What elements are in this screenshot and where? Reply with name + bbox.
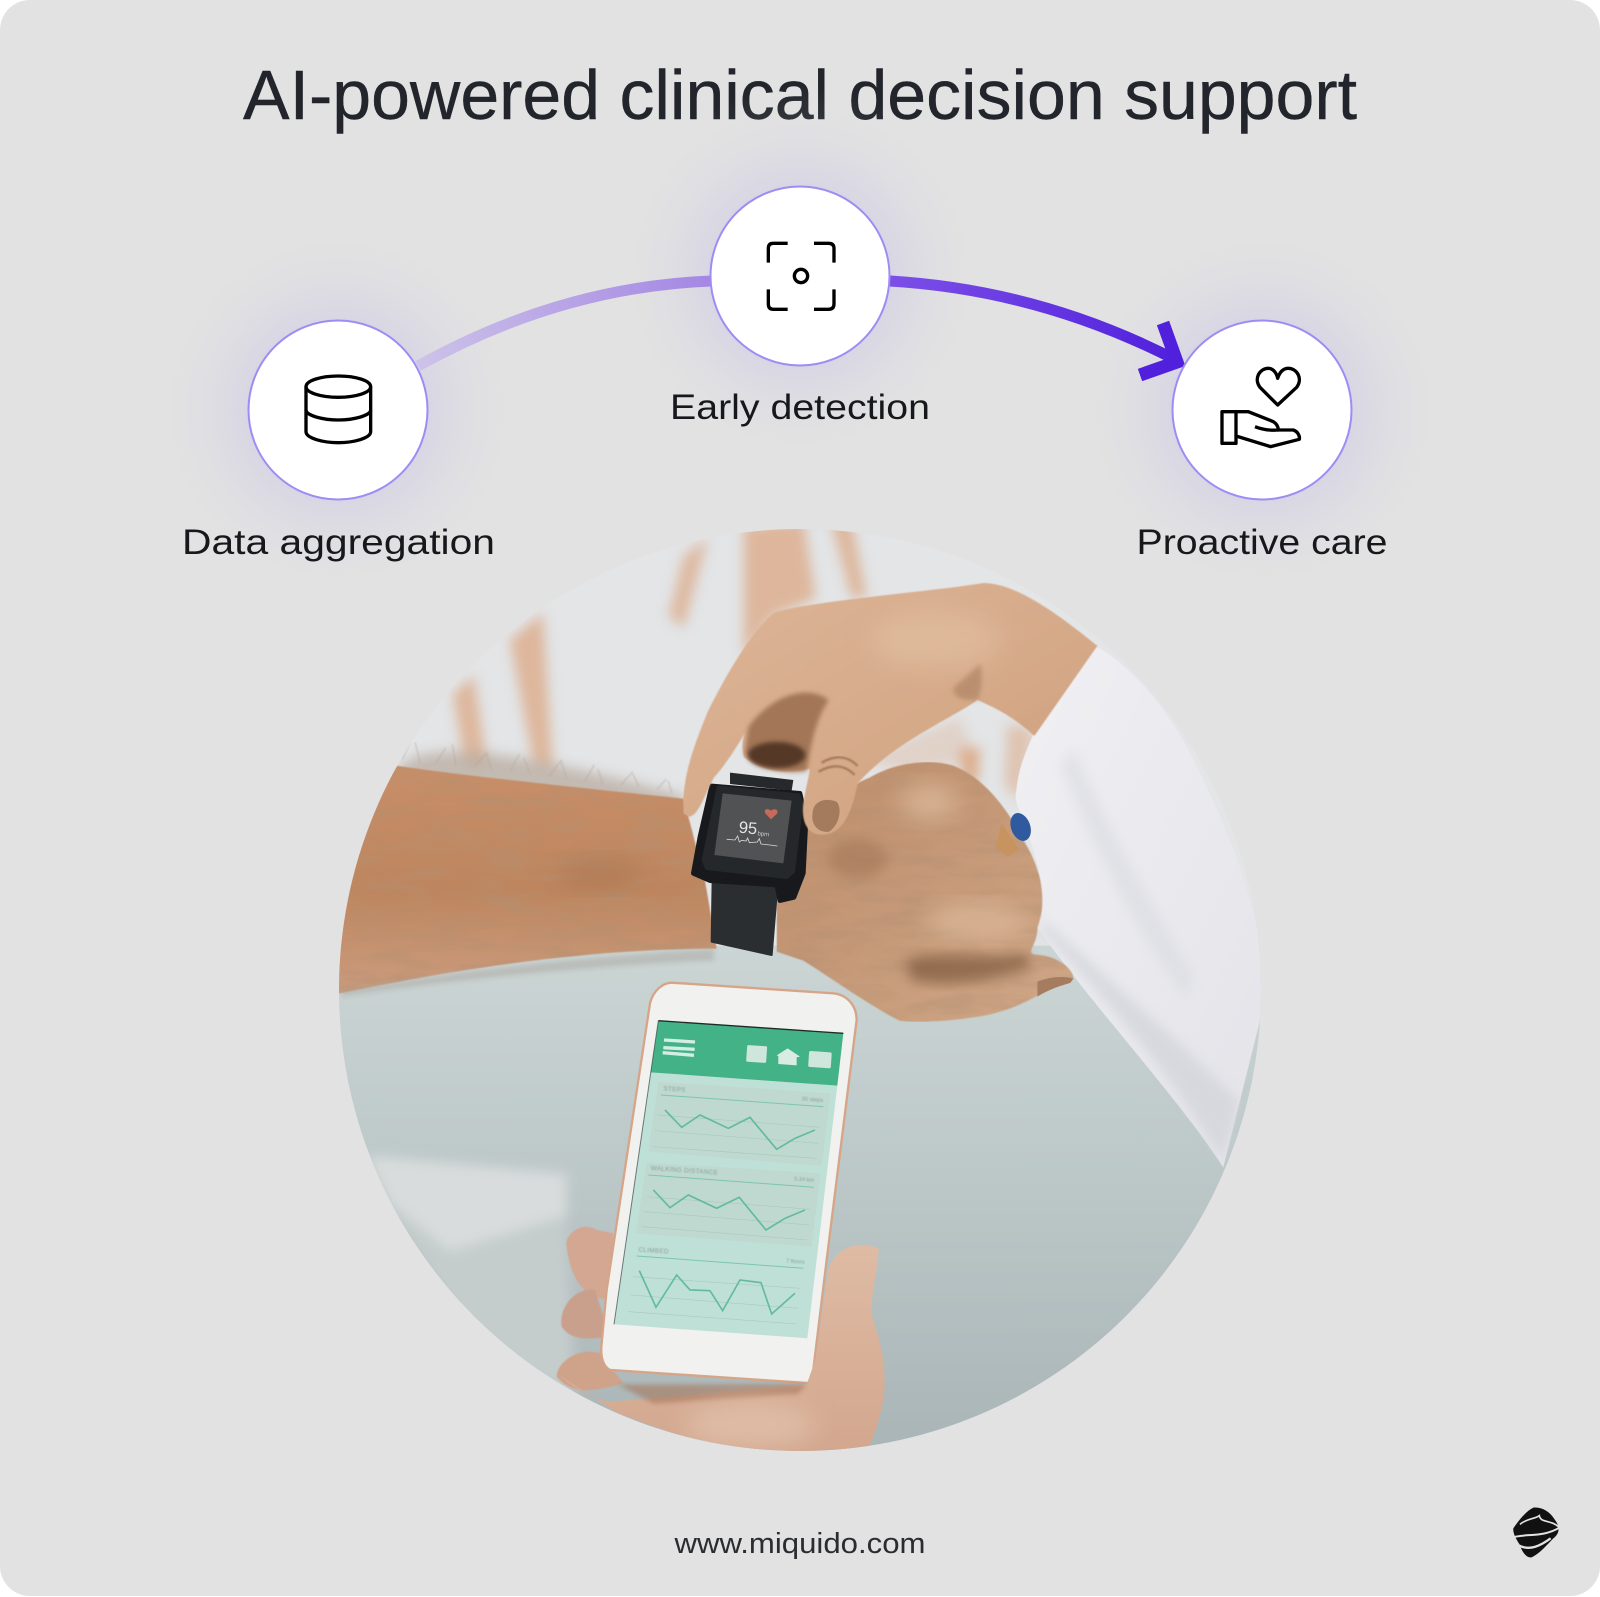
website url: www.miquido.com — [673, 1528, 926, 1560]
smartphone in hand — [557, 983, 857, 1390]
phone screen — [614, 1072, 837, 1338]
chart card: climbed — [628, 1246, 805, 1324]
node: proactive care — [1172, 320, 1352, 500]
logo — [1513, 1508, 1560, 1557]
icon: heart — [765, 809, 778, 819]
blurred furniture — [366, 1155, 576, 1395]
arm hair fuzz — [398, 742, 684, 799]
arrow: data aggregation to early detection — [418, 281, 711, 366]
chart card: walking distance — [642, 1164, 815, 1240]
heart rate unit: bpm — [757, 831, 769, 838]
label: early detection: Early detection — [670, 388, 930, 427]
photo: smartwatch and phone health tracking — [330, 520, 1271, 1461]
arrow: early detection to proactive care — [890, 281, 1177, 375]
white lab coat — [1016, 647, 1265, 1167]
icon: calendar — [808, 1051, 832, 1068]
node: data aggregation — [248, 320, 428, 500]
label: data aggregation: Data aggregation — [182, 523, 495, 562]
chart card: climbed: 7 floors — [786, 1258, 805, 1266]
icon: focus frame — [768, 243, 834, 309]
photo backdrop lower wall — [330, 946, 1271, 1461]
lower arm hair — [342, 949, 714, 997]
finger nail — [812, 800, 840, 832]
patient forearm — [330, 766, 717, 997]
knuckle wrinkles — [819, 757, 858, 775]
icon: database — [306, 376, 371, 443]
chart card: climbed: CLIMBED — [638, 1247, 669, 1256]
chart card: walking distance: 5.34 km — [794, 1177, 815, 1184]
watch case — [693, 786, 806, 901]
icon: menu — [663, 1040, 695, 1055]
process flow — [148, 86, 1452, 600]
smartwatch — [693, 773, 806, 955]
chart card: steps: STEPS — [663, 1086, 686, 1094]
finger shadow — [745, 693, 829, 772]
blurred anatomy chart — [453, 520, 1034, 802]
photo backdrop upper wall — [330, 520, 1271, 1012]
watch screen — [714, 793, 792, 863]
node glows — [148, 86, 1452, 600]
icon: hand with heart — [1222, 368, 1299, 447]
ring — [996, 813, 1031, 857]
node: early detection — [710, 186, 890, 366]
title: AI-powered clinical decision support — [243, 56, 1357, 134]
heart rate value: 95 — [738, 818, 758, 838]
ECG trace — [727, 836, 777, 846]
doctor's hand — [683, 583, 1097, 835]
hand holding phone — [558, 1245, 885, 1461]
watch strap top — [730, 773, 793, 791]
holding fingers — [557, 1227, 623, 1390]
phone body — [601, 983, 857, 1383]
patient hand — [777, 762, 1073, 1022]
chart card: steps: 30 steps — [802, 1097, 823, 1104]
app header — [651, 1021, 843, 1086]
icon: home — [777, 1048, 800, 1065]
watch strap bottom — [712, 879, 777, 955]
chart card: walking distance: WALKING DISTANCE — [651, 1165, 718, 1177]
chart card: steps — [652, 1085, 824, 1159]
icon: list — [746, 1045, 767, 1063]
label: proactive care: Proactive care — [1136, 523, 1388, 562]
